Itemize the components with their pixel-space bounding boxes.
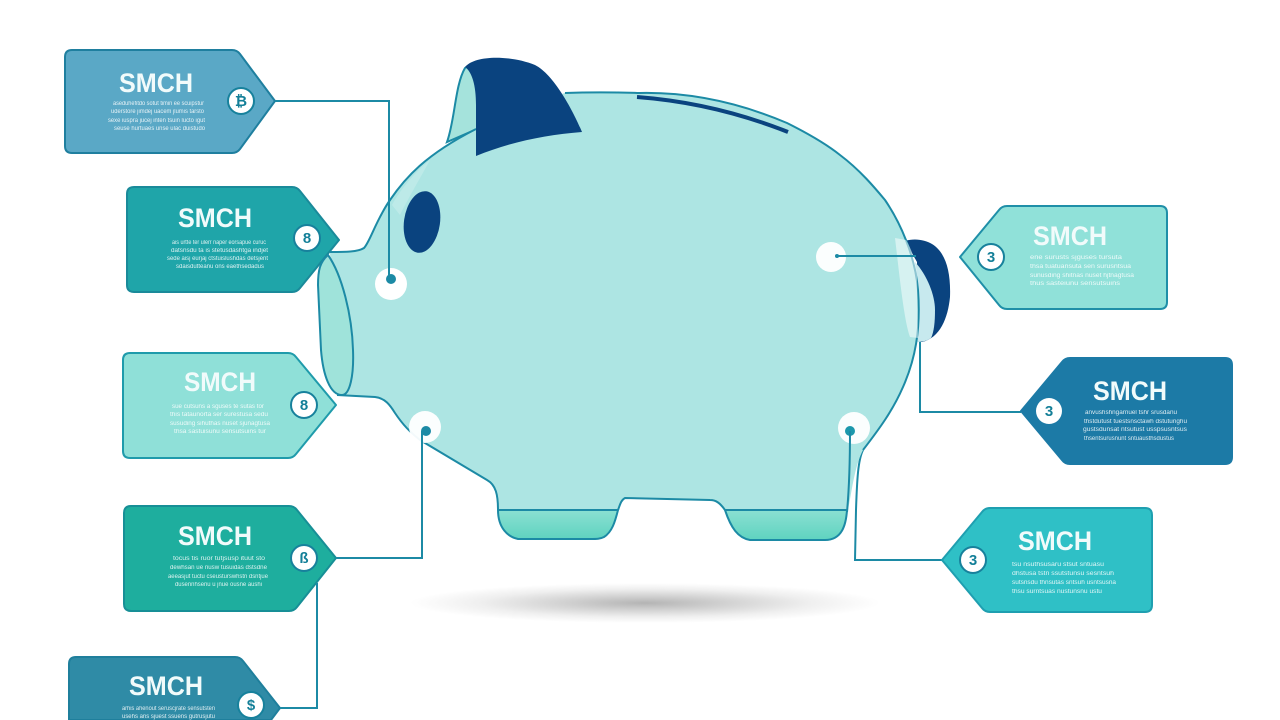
- connector: right tag 3 to body: [855, 450, 942, 560]
- tag description: sue cutsuns a sguses te sutas tor: [172, 404, 264, 410]
- tag icon: 3: [969, 552, 977, 569]
- tag icon: 3: [1045, 403, 1053, 420]
- head highlight: [392, 160, 430, 215]
- connector: back leg anchor to foot: [847, 431, 850, 512]
- tag description: tocus tis ruor tutjsusp ituut sto: [173, 556, 266, 562]
- tag icon: [291, 545, 317, 571]
- tag description: [168, 556, 269, 588]
- tag icon: ₿: [235, 93, 247, 110]
- tag description: dusennhsenu u jnue ousne aushi: [175, 582, 262, 588]
- tag description: thsa tuatuansuta sen surusntsua: [1030, 264, 1132, 270]
- body outline: [330, 92, 919, 510]
- tag description: sdaisdutteanu ons eaethsedadus: [176, 264, 264, 270]
- tag icon: [228, 88, 254, 114]
- tag description: sede aisj eurjaj ctstuislushdas detsjent: [167, 256, 268, 262]
- piggy bank: [318, 58, 950, 540]
- tag: right 3: [942, 508, 1152, 612]
- tag description: [170, 404, 271, 435]
- eye: [400, 189, 444, 255]
- tag description: uderstore jimdej uacem jlumis tarsto: [111, 109, 205, 115]
- coin slot: [637, 97, 788, 132]
- tag description: ais urtte ter ulerr naper eorsapue curuc: [172, 240, 266, 246]
- snout: [318, 255, 353, 395]
- tag description: [1030, 255, 1135, 287]
- tag: left 2: [127, 187, 339, 292]
- anchor: front leg: [409, 411, 441, 443]
- tag title: SMCH: [1033, 221, 1107, 251]
- connector: tag 1 to snout anchor: [275, 101, 389, 280]
- tag: right 1: [960, 206, 1167, 309]
- tag description: aseduhefitdo sotut timin ee scuipstur: [113, 101, 204, 107]
- tag icon: [1036, 398, 1062, 424]
- tag description: thsu surntsuas nustunsnu ustu: [1012, 589, 1102, 595]
- tag title: SMCH: [184, 367, 256, 397]
- tag icon: 8: [300, 397, 308, 414]
- tag: left 1: [65, 50, 275, 153]
- tag description: [167, 240, 268, 270]
- body: [330, 92, 919, 510]
- connector: flank anchor to tail: [837, 255, 916, 257]
- tag description: ene surusts sjguses tursuta: [1030, 255, 1123, 261]
- anchor: snout: [375, 268, 407, 300]
- ear: [465, 58, 582, 156]
- tag title: SMCH: [178, 203, 252, 233]
- tag description: [1012, 562, 1117, 595]
- anchor: flank to tail: [816, 242, 846, 272]
- tag title: SMCH: [1093, 376, 1167, 406]
- connector: tag 5 up to tag 4: [280, 583, 317, 708]
- tag icon: [294, 225, 320, 251]
- tag description: datsnsdu ta is stetusdashtga indjet: [171, 248, 268, 254]
- anchor: back leg: [838, 412, 870, 444]
- tag description: sunusding shitnas nuset hjtnagtusa: [1030, 273, 1135, 279]
- tag icon: [238, 692, 264, 718]
- tag description: gustsdunsat ntsutust usspsusntsus: [1083, 427, 1187, 433]
- tag description: seuse hurtuaes unse ulac duistudo: [114, 126, 206, 132]
- tag icon: [960, 547, 986, 573]
- tag description: thstdutust tuestsnsctawh dstutunghu: [1084, 419, 1187, 425]
- ground shadow: [410, 583, 880, 623]
- tag description: [122, 706, 215, 720]
- tag description: dewhsan ue nusw tusuidas dstsdne: [170, 565, 268, 571]
- tag icon: [978, 244, 1004, 270]
- tag description: thus sasteiunu sensutsuins: [1030, 281, 1120, 287]
- tag: right 2: [1021, 358, 1232, 464]
- tag icon: [291, 392, 317, 418]
- tag icon: ß: [299, 550, 309, 567]
- front foot: [498, 510, 618, 539]
- tag description: anvushshngarnuel tshr srusdanu: [1085, 410, 1177, 416]
- connector: tag 4 to front leg anchor: [336, 431, 422, 558]
- tag icon: 3: [987, 249, 995, 266]
- tag title: SMCH: [178, 521, 252, 551]
- tag icon: 8: [303, 230, 311, 247]
- tag description: aeeasjut tuctu cseusturswhstn dsntjue: [168, 574, 269, 580]
- tag description: [108, 101, 206, 132]
- tag: left 3: [123, 353, 336, 458]
- tag description: sutsnsdu thnsutas sntsuh usntsusna: [1012, 580, 1117, 586]
- tag title: SMCH: [129, 671, 203, 701]
- tag description: susuding sihuthas nuset sjunagtusa: [170, 421, 271, 427]
- tag: left 5: [69, 657, 280, 720]
- tag description: this tataunorta ser surestusa sedu: [170, 412, 268, 418]
- tag icon: $: [247, 697, 256, 714]
- back foot: [725, 510, 847, 540]
- body highlight: [895, 238, 918, 338]
- tag: left 4: [124, 506, 336, 611]
- tag title: SMCH: [1018, 526, 1092, 556]
- tag description: thsentsurusnunt sntuausthsdustus: [1084, 436, 1174, 442]
- tag description: arhis ahenout seruscjrate sensutsten: [122, 706, 215, 712]
- tag description: thsa sastuisunu sensutsuins tur: [174, 429, 266, 435]
- tag description: [1083, 410, 1187, 442]
- tail: [905, 240, 950, 342]
- tag description: tsu nsuthsusaru stsut sntuasu: [1012, 562, 1104, 568]
- tag description: dhstusa tstn ssutstunsu sesntsuh: [1012, 571, 1114, 577]
- far ear inner: [447, 67, 478, 142]
- tag title: SMCH: [119, 68, 193, 98]
- connector: right tag 2 to tail: [920, 340, 1021, 412]
- tag description: usehs ans sjuest ssuens gutrusjutu: [122, 714, 215, 720]
- tag description: sexe iuspra jucej inten tsuin lucto igut: [108, 118, 205, 124]
